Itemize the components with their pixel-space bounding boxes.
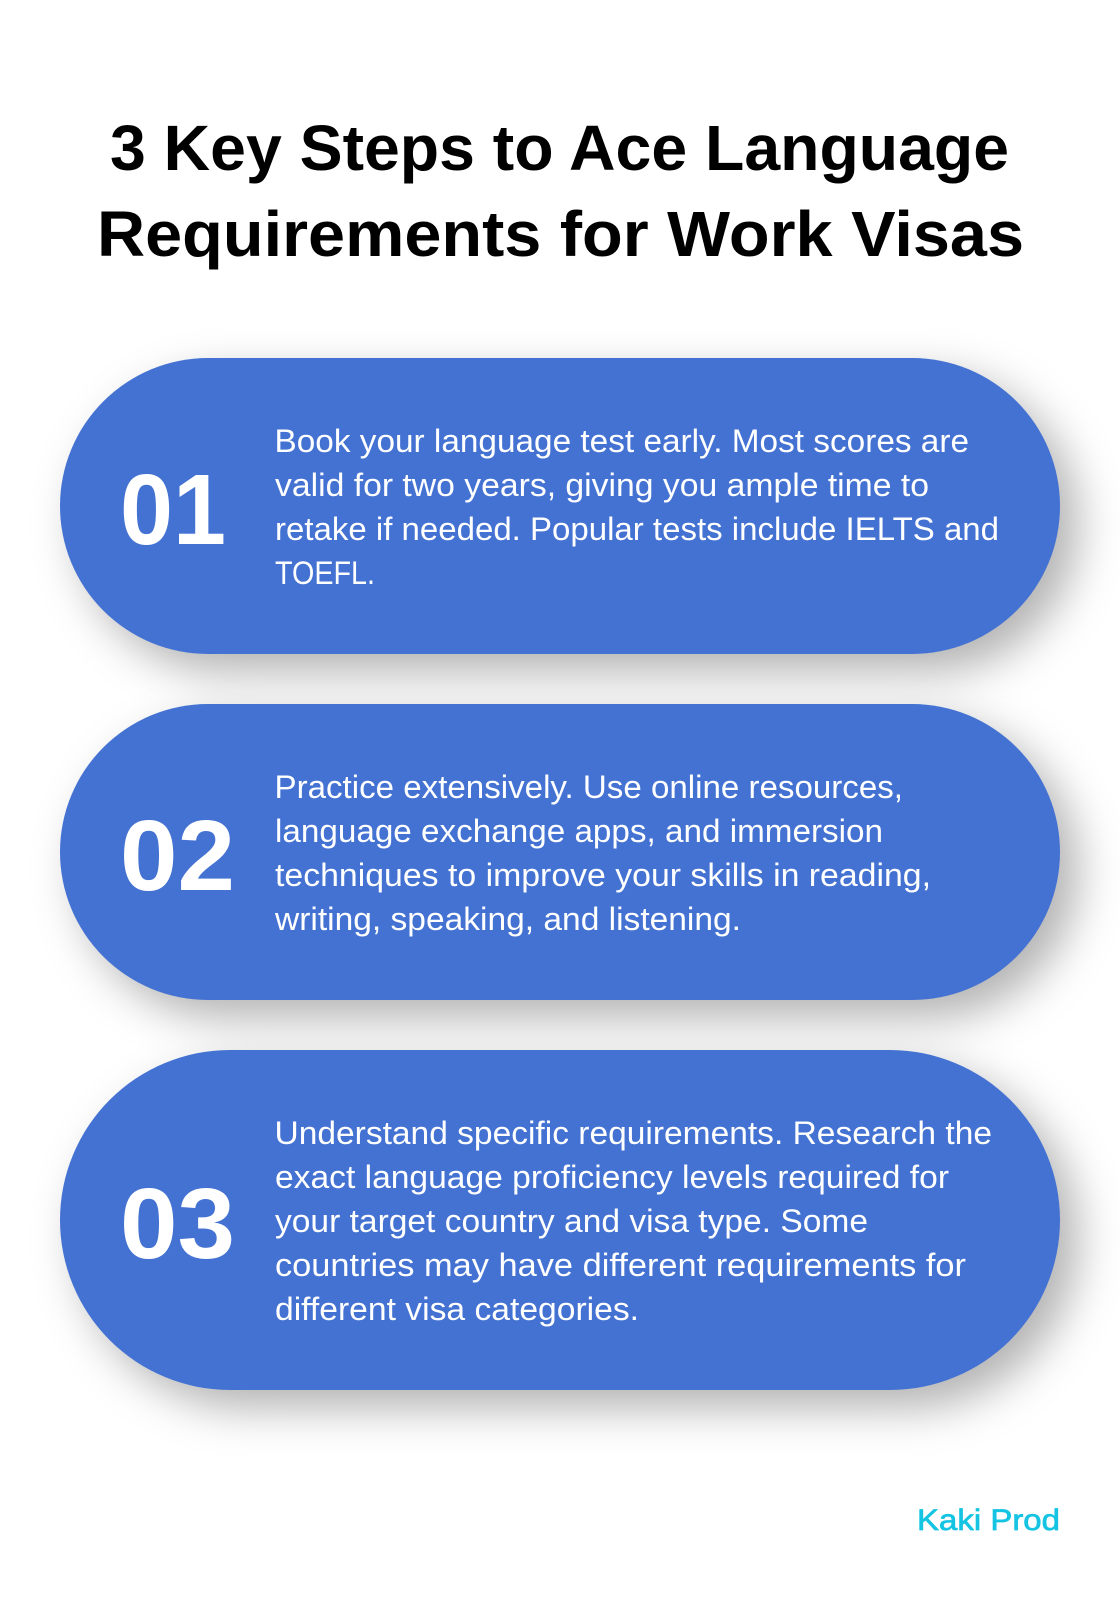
step 02 text: [274, 769, 931, 937]
card background 03: [60, 1050, 1060, 1390]
step number 02: 02: [120, 800, 235, 912]
panel: step 03: [60, 1050, 1060, 1390]
step 01 text: TOEFL.: [275, 555, 375, 591]
step 01 text: [274, 423, 999, 591]
title: 3 Key Steps to Ace Language: [110, 112, 1009, 184]
step 03 text: countries may have different requirements for: [275, 1247, 966, 1283]
step 03 text: your target country and visa type. Some: [275, 1203, 868, 1239]
card background 02: [60, 704, 1060, 1000]
step 02 text: techniques to improve your skills in reading,: [275, 857, 931, 893]
step number 01: 01: [120, 454, 226, 566]
step 03 text: different visa categories.: [275, 1291, 639, 1327]
title: [97, 112, 1024, 270]
panel: step 02: [60, 704, 1060, 1000]
logo: Kaki Prod: Kaki Prod: [917, 1504, 1060, 1537]
step 02 text: language exchange apps, and immersion: [275, 813, 883, 849]
title: Requirements for Work Visas: [97, 198, 1024, 270]
step 03 text: [274, 1115, 992, 1327]
step 03 text: Understand specific requirements. Research the: [274, 1115, 992, 1151]
step 01 text: retake if needed. Popular tests include IELTS and: [275, 511, 999, 547]
step 02 text: writing, speaking, and listening.: [274, 901, 741, 937]
card background 01: [60, 358, 1060, 654]
panel: step 01: [60, 358, 1060, 654]
step 01 text: Book your language test early. Most scores are: [274, 423, 969, 459]
step number 03: 03: [120, 1168, 235, 1280]
step 01 text: valid for two years, giving you ample time to: [275, 467, 929, 503]
step 02 text: Practice extensively. Use online resources,: [274, 769, 903, 805]
step 03 text: exact language proficiency levels required for: [275, 1159, 949, 1195]
